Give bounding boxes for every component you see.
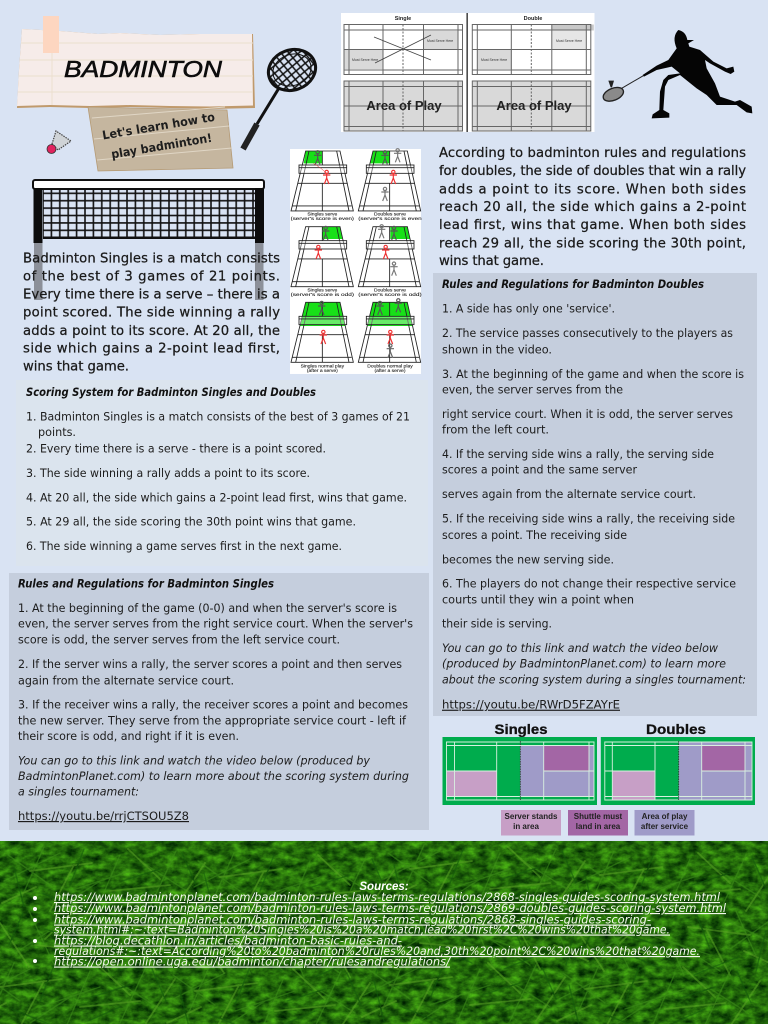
icon: shuttlecock	[47, 131, 71, 154]
icon: racket	[243, 43, 321, 149]
single serve court	[344, 24, 462, 74]
doubles serve odd: Doubles serve	[374, 288, 406, 294]
double play area: Area of Play	[496, 98, 572, 113]
doubles video link: https://youtu.be/RWrD5FZAYrE	[442, 698, 620, 712]
singles video note	[18, 753, 409, 799]
doubles serve even: (server's score is even	[358, 216, 422, 222]
scoring list: 2. Every time there is a serve - there is a point scored.	[26, 442, 326, 456]
source links: regulations#:~:text=According%20to%20badminton%20rules%20and,30th%20point%2C%20wins%20that%20game.	[54, 944, 700, 958]
source links	[54, 890, 727, 968]
subtitle note: learn how to play	[88, 107, 233, 171]
doubles normal play: (after a serve)	[374, 368, 406, 374]
singles rules list: 1. At the beginning of the game (0-0) and when the server's score is	[18, 601, 397, 615]
text: doubles intro paragraph: wins that game.	[439, 254, 544, 269]
singles normal play: (after a serve)	[307, 368, 338, 374]
doubles video note	[442, 641, 746, 686]
source links: https://www.badmintonplanet.com/badminton-rules-laws-terms-regulations/2869-doubles-guides-scoring-system.html	[54, 901, 727, 915]
singles rules list: score is odd, the server serves from the left service court.	[18, 632, 340, 646]
doubles rules list: becomes the new serving side.	[442, 552, 614, 566]
doubles video note: about the scoring system during a singles tournament:	[442, 672, 746, 686]
legend: area of play after service: Area of play	[642, 812, 688, 821]
singles serve even: (server's score is even)	[291, 216, 354, 222]
single serve court: Must Serve Here	[427, 39, 453, 43]
heading: singles court: Singles	[494, 721, 548, 737]
diagram: singles court	[442, 737, 597, 805]
sources list	[33, 881, 727, 968]
doubles rules list: 2. The service passes consecutively to the players as	[442, 326, 733, 340]
diagram: single and double service courts	[341, 13, 594, 132]
doubles video note: You can go to this link and watch the video below	[442, 641, 718, 655]
singles serve even	[291, 151, 354, 222]
diagram: doubles court	[601, 737, 755, 805]
scoring list: points.	[38, 425, 76, 439]
singles serve odd: Singles serve	[307, 288, 338, 294]
text: doubles intro paragraph: for doubles, the side of doubles that win a rally	[439, 164, 746, 179]
doubles rules list: from the left court.	[442, 422, 549, 436]
text: singles intro paragraph: wins that game.	[23, 360, 129, 375]
sources heading: Sources:	[359, 881, 409, 893]
doubles rules list: scores a point and the same server	[442, 463, 637, 477]
doubles rules list: scores a point. The receiving side	[442, 528, 627, 542]
doubles rules list: 5. If the receiving side wins a rally, the receiving side	[442, 511, 735, 525]
heading: single: Single	[395, 16, 411, 22]
doubles rules list: courts until they win a point when	[442, 592, 634, 606]
doubles rules list: shown in the video.	[442, 342, 552, 356]
double serve court	[472, 24, 594, 74]
singles video note: a singles tournament:	[18, 785, 139, 799]
source links: https://open.online.uga.edu/badminton/chapter/rulesandregulations/	[54, 954, 451, 968]
double serve court: Must Serve Here	[556, 39, 582, 43]
heading: doubles court: Doubles	[646, 721, 706, 737]
text: singles intro paragraph: point scored. The side winning a rally	[23, 306, 280, 321]
singles rules list: 3. If the receiver wins a rally, the receiver scores a point and becomes	[18, 698, 408, 712]
single play area	[344, 81, 462, 131]
singles rules list: again from the alternate service court.	[18, 673, 234, 687]
doubles rules list: serves again from the alternate service court.	[442, 487, 696, 501]
singles normal play: Singles normal play	[301, 364, 345, 370]
source links: https://blog.decathlon.in/articles/badminton-basic-rules-and-	[54, 934, 402, 948]
singles video note: You can go to this link and watch the video below (produced by	[18, 753, 371, 767]
source links: https://www.badmintonplanet.com/badminton-rules-laws-terms-regulations/2868-singles-guides-scoring-	[54, 912, 651, 926]
legend: server stands in area	[501, 810, 561, 836]
doubles rules list: 3. At the beginning of the game and when the score is	[442, 367, 744, 381]
legend: shuttle must land in area: land in area	[576, 822, 621, 831]
single serve court: Must Serve Here	[352, 58, 378, 62]
text: doubles intro paragraph: adds a point to its score. When both sides	[439, 182, 746, 197]
singles rules list: even, the server serves from the right service court. When the server's	[18, 617, 413, 631]
text: doubles intro paragraph: lead first, wins that game. When both sides	[439, 218, 746, 233]
footer: grass background	[0, 841, 768, 1024]
doubles rules list	[442, 302, 744, 631]
single play area: Area of Play	[366, 98, 442, 113]
legend: server stands in area: Server stands	[505, 812, 558, 821]
doubles serve odd: (server's score is odd)	[358, 292, 422, 298]
legend: shuttle must land in area	[568, 810, 628, 836]
doubles normal play: Doubles normal play	[367, 364, 413, 370]
doubles serve even: Doubles serve	[374, 212, 406, 218]
doubles rules list: right service court. When it is odd, the server serves	[442, 407, 733, 421]
singles rules list	[18, 601, 413, 743]
legend: shuttle must land in area: Shuttle must	[574, 812, 623, 821]
doubles rules list: 1. A side has only one 'service'.	[442, 302, 615, 316]
text: singles intro paragraph: Badminton Singles is a match consists	[23, 252, 280, 267]
doubles rules list: their side is serving.	[442, 617, 552, 631]
illustration: net	[33, 180, 264, 300]
singles rules list: their score is odd, and right if it is even.	[18, 729, 239, 743]
text: singles intro paragraph: of the best of 3 games of 21 points.	[23, 269, 280, 284]
doubles serve even	[358, 149, 422, 222]
doubles rules list: even, the server serves from the	[442, 382, 623, 396]
double play area	[472, 81, 591, 131]
singles serve even: Singles serve	[307, 212, 338, 218]
text: doubles intro paragraph: reach 20 all, the side which gains a 2-point	[439, 200, 746, 215]
scoring list: 3. The side winning a rally adds a point to its score.	[26, 466, 310, 480]
doubles serve odd	[358, 225, 422, 298]
heading: scoring system: Scoring System for Badminton Singles and Doubles	[26, 385, 316, 399]
title text: BADMINTON	[64, 56, 222, 82]
singles serve odd	[291, 226, 354, 298]
doubles rules list: 4. If the serving side wins a rally, the serving side	[442, 447, 714, 461]
panel: scoring system	[16, 380, 428, 566]
source bullets	[33, 896, 37, 963]
source links: system.html#:~:text=Badminton%20Singles%20is%20a%20match,lead%20first%2C%20wins%20that%20game.	[54, 922, 670, 936]
text: singles intro paragraph: adds a point to its score. At 20 all, the	[23, 324, 280, 339]
text: singles intro paragraph: side which gains a 2-point lead first,	[23, 342, 280, 357]
legend: server stands in area: in area	[513, 822, 539, 831]
scoring list	[26, 409, 410, 553]
text: singles intro paragraph: Every time there is a serve – there is a	[23, 287, 280, 302]
singles serve odd: (server's score is odd)	[291, 292, 354, 298]
panel: singles rules	[9, 573, 429, 830]
double serve court: Must Serve Here	[481, 58, 507, 62]
heading: singles rules: Rules and Regulations for Badminton Singles	[18, 577, 274, 591]
text: doubles intro paragraph	[439, 146, 746, 269]
doubles rules list: 6. The players do not change their respective service	[442, 577, 736, 591]
panel: doubles rules	[433, 273, 757, 716]
singles rules list: the new server. They serve from the appropriate service court - left if	[18, 713, 407, 727]
singles rules list: 2. If the server wins a rally, the server scores a point and then serves	[18, 657, 402, 671]
tape	[43, 16, 59, 53]
singles video link: https://youtu.be/rrjCTSOU5Z8	[18, 809, 189, 823]
scoring list: 4. At 20 all, the side which gains a 2-point lead first, wins that game.	[26, 490, 407, 504]
legend: area of play after service: after service	[641, 822, 689, 831]
scoring list: 6. The side winning a game serves first in the next game.	[26, 539, 342, 553]
singles normal play	[291, 301, 353, 374]
subtitle note: learn how to play: play badminton!	[110, 131, 213, 161]
legend: area of play after service	[634, 810, 694, 836]
text: singles intro paragraph	[23, 252, 280, 375]
heading: doubles rules: Rules and Regulations for Badminton Doubles	[442, 277, 704, 291]
icon: player silhouette	[601, 30, 752, 118]
doubles normal play	[358, 299, 421, 374]
singles video note: BadmintonPlanet.com) to learn more about the scoring system during	[18, 769, 409, 783]
source links: https://www.badmintonplanet.com/badminton-rules-laws-terms-regulations/2868-singles-guides-scoring-system.html	[54, 890, 721, 904]
text: doubles intro paragraph: reach 29 all, the side scoring the 30th point,	[439, 236, 746, 251]
text: doubles intro paragraph: According to badminton rules and regulations	[439, 146, 746, 161]
heading: double: Double	[524, 16, 542, 22]
doubles video note: (produced by BadmintonPlanet.com) to learn more	[442, 657, 726, 671]
scoring list: 1. Badminton Singles is a match consists of the best of 3 games of 21	[26, 409, 410, 423]
scoring list: 5. At 29 all, the side scoring the 30th point wins that game.	[26, 515, 356, 529]
title note: BADMINTON	[17, 16, 255, 109]
subtitle note: learn how to play: Let's learn how to	[101, 110, 216, 142]
diagram: serve positions	[290, 149, 422, 374]
